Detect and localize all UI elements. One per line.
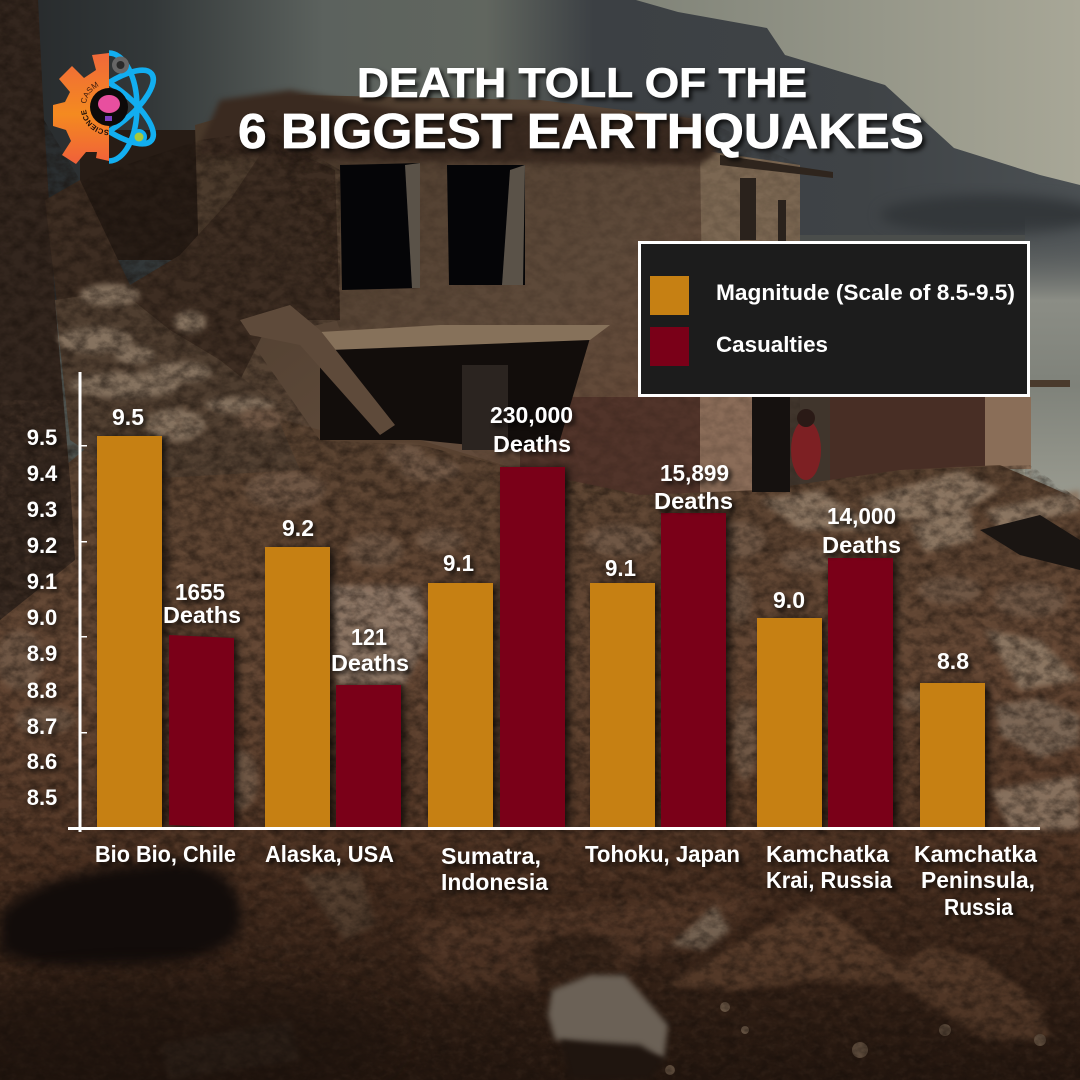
logo centre disc with brain: [90, 88, 128, 126]
logo grey moon: [112, 56, 129, 74]
title: 6 BIGGEST EARTHQUAKES: [238, 105, 924, 159]
bar value labels: [112, 402, 969, 676]
legend label: magnitude: Magnitude (Scale of 8.5-9.5): [716, 280, 1015, 305]
bar value labels: 121: [351, 624, 387, 650]
location labels: Sumatra,: [441, 843, 541, 869]
bar value labels: 8.8: [937, 648, 969, 674]
y-axis scale labels: 9.4: [27, 461, 58, 486]
location labels: Bio Bio, Chile: [95, 841, 236, 867]
location labels: Peninsula,: [921, 867, 1035, 893]
bar value labels: Deaths: [822, 532, 901, 558]
doorway and person in red: [752, 397, 790, 492]
bars: Kamchatka Krai, Russia: [757, 558, 893, 828]
y-axis scale labels: 8.8: [27, 678, 57, 703]
ground lit path and rocks: [410, 890, 760, 990]
y-axis scale labels: 9.5: [27, 425, 57, 450]
bars: Kamchatka Peninsula, Russia: [920, 683, 985, 828]
bar value labels: 14,000: [827, 503, 896, 529]
title: [238, 59, 924, 159]
bars: Sumatra, Indonesia: [428, 467, 565, 828]
location labels: Tohoku, Japan: [585, 841, 740, 867]
dark foreground rock: [0, 862, 242, 966]
y-axis scale labels: 8.5: [27, 785, 57, 810]
bar value labels: Deaths: [493, 431, 571, 457]
bars: Tohoku, Japan: [590, 513, 726, 828]
logo earth: [131, 129, 147, 145]
right boulders: [995, 698, 1080, 758]
chart axes: [68, 372, 1040, 832]
bar value labels: 9.0: [773, 587, 805, 613]
location labels: Indonesia: [441, 869, 548, 895]
location labels: Russia: [944, 894, 1013, 920]
title: DEATH TOLL OF THE: [357, 59, 807, 106]
legend panel: [640, 242, 1028, 396]
bar value labels: Deaths: [654, 488, 733, 514]
bar value labels: 9.5: [112, 404, 144, 430]
logo wordmark: SCIENCE: [81, 110, 109, 136]
location labels: [95, 841, 1037, 920]
y-axis scale labels: 9.0: [27, 605, 57, 630]
y-axis scale labels: 8.6: [27, 749, 57, 774]
bar value labels: 9.1: [605, 555, 636, 581]
bar chart: [68, 372, 1040, 832]
y-axis scale labels: 9.2: [27, 533, 57, 558]
lower opening, roof slab and beam: [320, 338, 590, 450]
bar value labels: 9.2: [282, 515, 314, 541]
bar value labels: 9.1: [443, 550, 474, 576]
bar value labels: 230,000: [490, 402, 573, 428]
legend swatch: magnitude: [650, 276, 689, 315]
y-axis scale labels: 9.3: [27, 497, 57, 522]
location labels: Alaska, USA: [265, 841, 394, 867]
logo wordmark: [81, 82, 109, 136]
y-axis scale labels: 9.1: [27, 569, 57, 594]
logo wordmark: CASM: [81, 82, 98, 103]
location labels: Kamchatka: [766, 841, 889, 867]
bars: Alaska, USA: [265, 547, 401, 828]
large pale boulder behind bars: [330, 585, 428, 685]
bar value labels: Deaths: [331, 650, 409, 676]
windows: [340, 163, 420, 290]
y-axis scale labels: 8.7: [27, 714, 57, 739]
bar value labels: Deaths: [163, 602, 241, 628]
bar value labels: 15,899: [660, 460, 729, 486]
stone in foreground: [548, 975, 668, 1058]
bars: Bio Bio, Chile: [97, 436, 234, 828]
location labels: Kamchatka: [914, 841, 1037, 867]
legend label: casualties: Casualties: [716, 332, 828, 357]
location labels: Krai, Russia: [766, 867, 892, 893]
y-axis scale labels: [27, 425, 58, 810]
logo atom rings: [109, 50, 156, 164]
bar value labels: 1655: [175, 579, 225, 605]
y-axis scale labels: 8.9: [27, 641, 57, 666]
logo: Sciencecasm gear and atom: [53, 50, 156, 164]
logo gear half: [53, 53, 109, 164]
legend swatch: casualties: [650, 327, 689, 366]
